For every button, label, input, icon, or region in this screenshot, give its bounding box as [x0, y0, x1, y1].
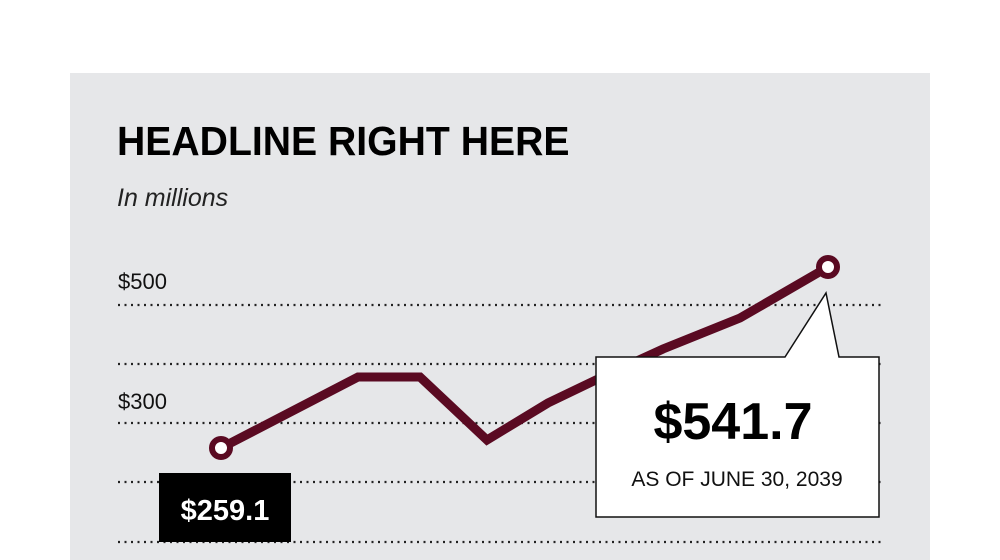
callout: end value — [596, 293, 879, 517]
data line — [212, 258, 837, 457]
axis labels — [118, 269, 167, 414]
callout: start value: $259.1 — [181, 495, 269, 527]
callout: end value: AS OF JUNE 30, 2039 — [631, 468, 843, 491]
callout: start value — [159, 473, 291, 542]
panel: chart background — [70, 73, 930, 560]
callout: end value: $541.7 — [653, 393, 813, 451]
title: HEADLINE RIGHT HERE — [117, 118, 569, 164]
subtitle: In millions — [117, 184, 228, 212]
axis labels: $300 — [118, 389, 167, 414]
axis labels: $500 — [118, 269, 167, 294]
